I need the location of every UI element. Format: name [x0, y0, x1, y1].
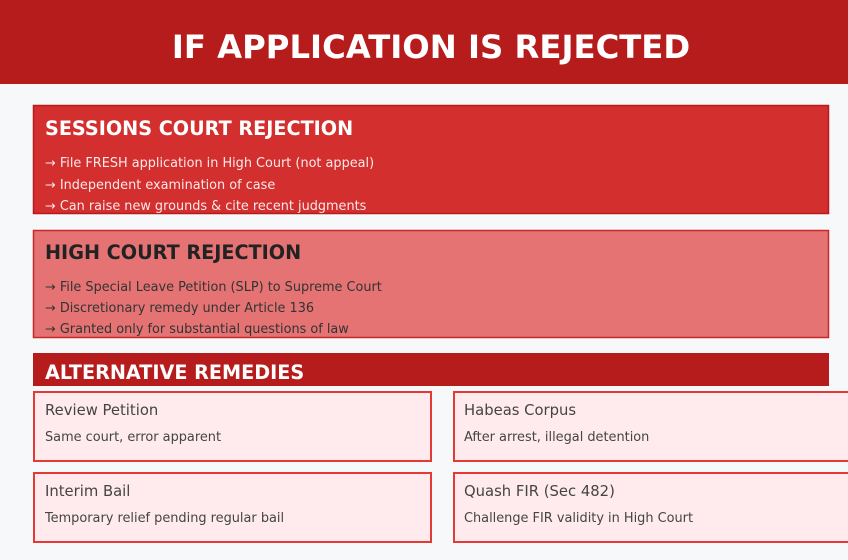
panel: sessions court rejection: SESSIONS COURT REJECTION — [45, 117, 353, 140]
panel: high court rejection: → Discretionary remedy under Article 136 — [45, 301, 314, 316]
card: interim bail — [34, 473, 431, 542]
heading: alternative remedies: ALTERNATIVE REMEDIES — [45, 361, 304, 384]
title banner: IF APPLICATION IS REJECTED — [172, 28, 690, 66]
panel: sessions court rejection: → Independent examination of case — [45, 178, 275, 193]
card: review petition: Same court, error apparent — [45, 430, 221, 445]
card: quash FIR — [454, 473, 848, 542]
card: quash FIR: Challenge FIR validity in High Court — [464, 511, 693, 526]
card: habeas corpus — [454, 392, 848, 461]
title banner — [0, 0, 848, 84]
panel: sessions court rejection: → Can raise new grounds & cite recent judgments — [45, 199, 367, 214]
card: review petition: Review Petition — [45, 402, 158, 419]
panel: high court rejection: HIGH COURT REJECTION — [45, 241, 301, 264]
card: habeas corpus: After arrest, illegal detention — [464, 430, 649, 445]
card: interim bail: Interim Bail — [45, 483, 130, 500]
card: review petition — [34, 392, 431, 461]
panel: high court rejection: → File Special Leave Petition (SLP) to Supreme Court — [45, 280, 382, 295]
panel: sessions court rejection — [34, 106, 828, 214]
panel: high court rejection: → Granted only for substantial questions of law — [45, 322, 349, 337]
card: quash FIR: Quash FIR (Sec 482) — [464, 483, 615, 500]
panel: high court rejection — [34, 230, 828, 338]
panel: sessions court rejection: → File FRESH application in High Court (not appeal) — [45, 156, 374, 171]
heading: alternative remedies — [33, 353, 829, 386]
card: interim bail: Temporary relief pending regular bail — [44, 511, 284, 526]
card: habeas corpus: Habeas Corpus — [464, 402, 576, 419]
